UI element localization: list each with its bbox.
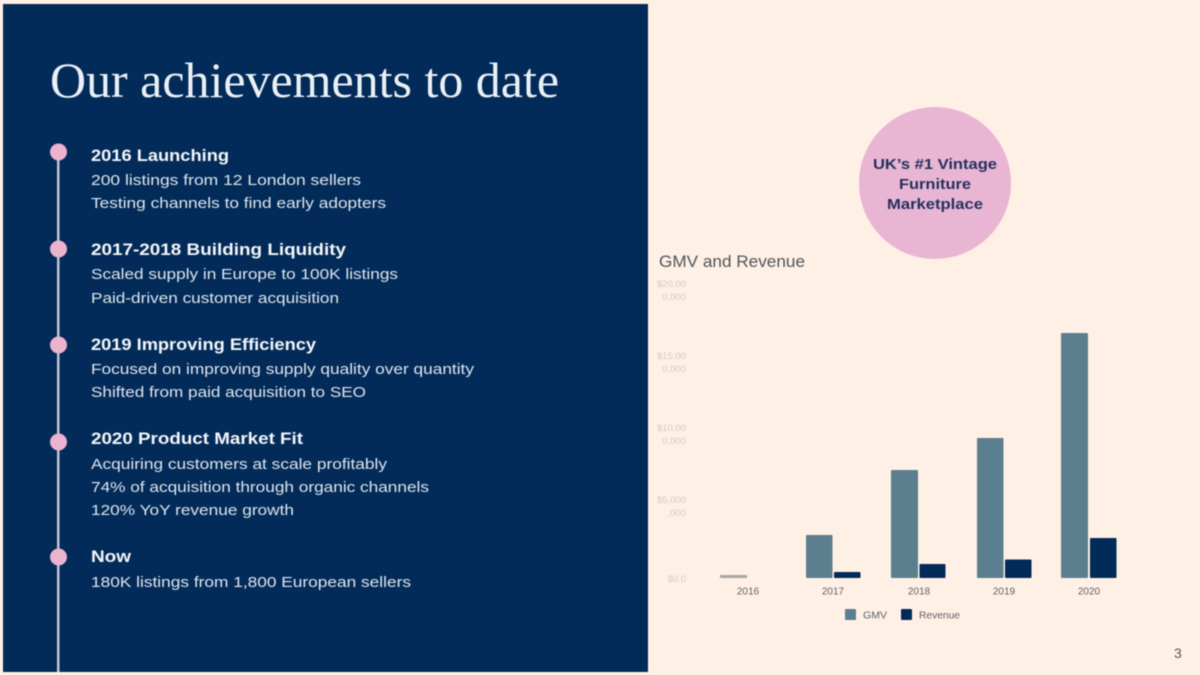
milestone: 2020: 120% YoY revenue growth: [91, 502, 294, 519]
milestone: 2020: Acquiring customers at scale profitably: [91, 456, 388, 473]
timeline dot: 2017-2018: [50, 240, 67, 258]
milestone: 2020: [91, 429, 429, 519]
milestone: 2016: [91, 146, 386, 212]
y axis labels: $10,00: [657, 423, 686, 434]
milestone: 2019: Focused on improving supply quality over quantity: [91, 361, 475, 378]
x axis labels: 2016: [737, 586, 760, 598]
x axis labels: 2017: [822, 586, 845, 598]
milestone: now: 180K listings from 1,800 European sellers: [91, 574, 411, 591]
milestone: 2016: 200 listings from 12 London sellers: [91, 172, 361, 189]
milestone: 2019: 2019 Improving Efficiency: [91, 335, 317, 354]
x axis labels: 2020: [1078, 586, 1101, 598]
y axis labels: 0,000: [662, 364, 686, 375]
y axis labels: [657, 279, 686, 585]
milestone: 2017-2018: Paid-driven customer acquisition: [91, 290, 339, 307]
milestone: 2017-2018: [91, 240, 398, 307]
y axis labels: $15,00: [657, 351, 686, 362]
callout: UK's #1 badge: UK’s #1 Vintage: [873, 156, 997, 173]
x axis labels: [737, 586, 1101, 598]
legend: GMV: [863, 610, 887, 622]
y axis labels: $20,00: [657, 279, 686, 290]
y axis labels: ,000: [668, 508, 686, 519]
milestone: 2020: 2020 Product Market Fit: [91, 429, 303, 448]
bar chart: GMV and Revenue: [657, 252, 1116, 622]
y axis labels: $0.0: [668, 574, 686, 585]
callout: UK's #1 badge: Furniture: [899, 176, 971, 193]
y axis labels: 0,000: [662, 436, 686, 447]
legend: Revenue: [919, 610, 960, 622]
x axis labels: 2019: [993, 586, 1016, 598]
y axis labels: 0,000: [662, 292, 686, 303]
revenue bars: [834, 538, 1116, 578]
timeline dot: now: [50, 548, 67, 566]
timeline dot: 2019: [50, 336, 67, 354]
milestone: 2020: 74% of acquisition through organic channels: [91, 479, 429, 496]
callout: UK's #1 badge: Marketplace: [887, 196, 983, 213]
y axis labels: $5,000: [657, 495, 686, 506]
milestone: 2019: Shifted from paid acquisition to SEO: [91, 384, 366, 401]
x axis labels: 2018: [908, 586, 931, 598]
milestone: 2016: Testing channels to find early adopters: [91, 195, 386, 212]
milestone: 2016: 2016 Launching: [91, 146, 229, 165]
chart title: GMV and Revenue: [659, 252, 805, 271]
milestone: now: [91, 547, 411, 591]
milestone: 2019: [91, 335, 475, 401]
title: Our achievements to date: [50, 52, 559, 108]
callout: UK's #1 badge: [859, 107, 1011, 259]
panel: achievements timeline: [3, 4, 648, 672]
timeline line: [57, 152, 60, 672]
legend: [845, 609, 960, 622]
timeline dot: 2020: [50, 434, 67, 450]
milestone: 2017-2018: 2017-2018 Building Liquidity: [91, 240, 347, 259]
milestone: now: Now: [91, 547, 132, 566]
GMV bars: [720, 333, 1088, 578]
milestone: 2017-2018: Scaled supply in Europe to 100K listings: [91, 266, 398, 283]
timeline dot: 2016: [50, 144, 67, 160]
page number: 3: [1174, 645, 1182, 661]
